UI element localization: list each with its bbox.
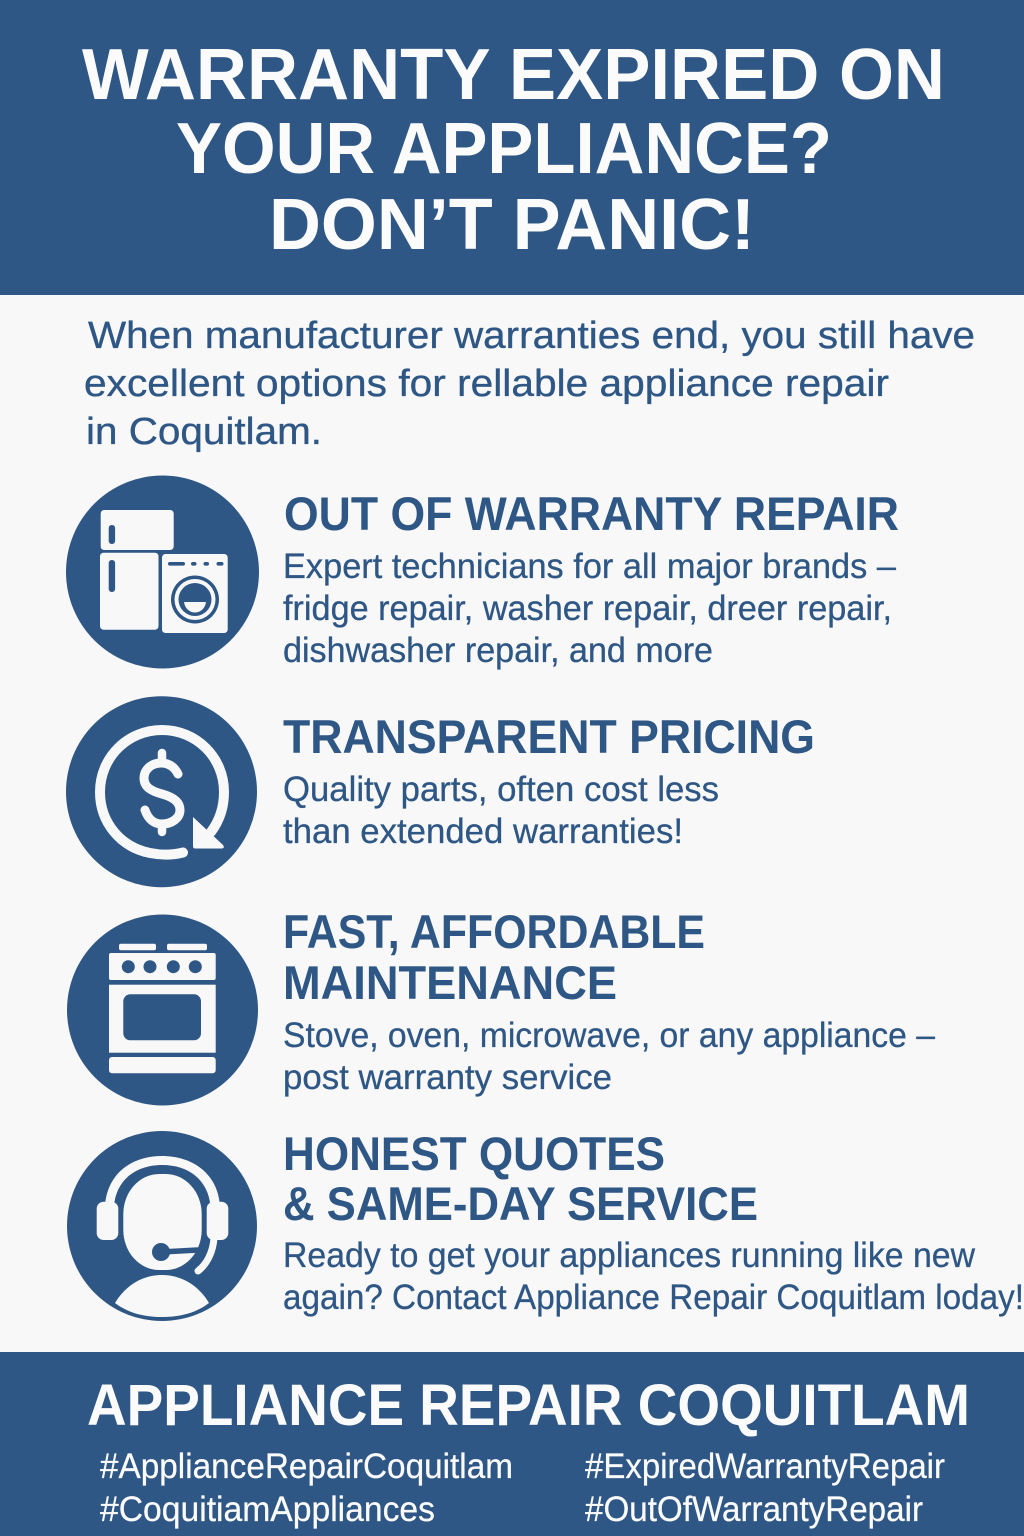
body: out of warranty repair: fridge repair, washer repair, dreer repair, xyxy=(283,589,892,628)
body: honest quotes xyxy=(283,1236,1024,1317)
body: out of warranty repair: Expert technicians for all major brands – xyxy=(283,547,897,586)
heading: fast affordable maintenance xyxy=(283,905,705,1009)
body: transparent pricing: Quality parts, often cost less xyxy=(283,770,719,809)
footer banner xyxy=(0,1352,1024,1536)
hashtags: #OutOfWarrantyRepair xyxy=(585,1490,923,1529)
icon: fridge and washer xyxy=(66,476,259,668)
body: fast affordable maintenance: Stove, oven, microwave, or any appliance – xyxy=(283,1016,936,1055)
header banner xyxy=(0,0,1024,295)
heading: out of warranty repair: OUT OF WARRANTY REPAIR xyxy=(284,487,899,540)
heading: honest quotes xyxy=(283,1127,758,1230)
footer title: APPLIANCE REPAIR COQUITLAM xyxy=(87,1373,970,1438)
title xyxy=(82,35,945,265)
intro text: excellent options for rellable appliance repair xyxy=(84,363,889,405)
body: transparent pricing xyxy=(283,770,719,851)
heading: fast affordable maintenance: MAINTENANCE xyxy=(283,956,617,1009)
icon: stove xyxy=(67,914,258,1106)
heading: fast affordable maintenance: FAST, AFFORDABLE xyxy=(283,905,705,958)
icon: dollar with circular arrow xyxy=(66,696,257,887)
body: honest quotes: Ready to get your appliances running like new xyxy=(283,1236,976,1275)
heading: honest quotes: HONEST QUOTES xyxy=(283,1127,665,1180)
body: fast affordable maintenance xyxy=(283,1016,936,1097)
body: out of warranty repair xyxy=(283,547,897,670)
title: YOUR APPLIANCE? xyxy=(176,109,832,189)
icon: headset agent xyxy=(67,1131,257,1321)
intro text: When manufacturer warranties end, you still have xyxy=(88,315,975,357)
title: DON’T PANIC! xyxy=(269,185,755,265)
title: WARRANTY EXPIRED ON xyxy=(82,35,945,115)
body: transparent pricing: than extended warranties! xyxy=(283,812,683,851)
body: fast affordable maintenance: post warranty service xyxy=(283,1058,612,1097)
heading: honest quotes: & SAME-DAY SERVICE xyxy=(283,1177,758,1230)
hashtags: #ExpiredWarrantyRepair xyxy=(585,1447,945,1486)
hashtags: #CoquitiamAppliances xyxy=(100,1490,435,1529)
body: out of warranty repair: dishwasher repair, and more xyxy=(283,631,713,670)
hashtags: #ApplianceRepairCoquitlam xyxy=(100,1447,513,1486)
intro text xyxy=(84,315,975,453)
heading: transparent pricing: TRANSPARENT PRICING xyxy=(283,710,815,763)
hashtags xyxy=(100,1447,945,1529)
intro text: in Coquitlam. xyxy=(86,411,322,453)
